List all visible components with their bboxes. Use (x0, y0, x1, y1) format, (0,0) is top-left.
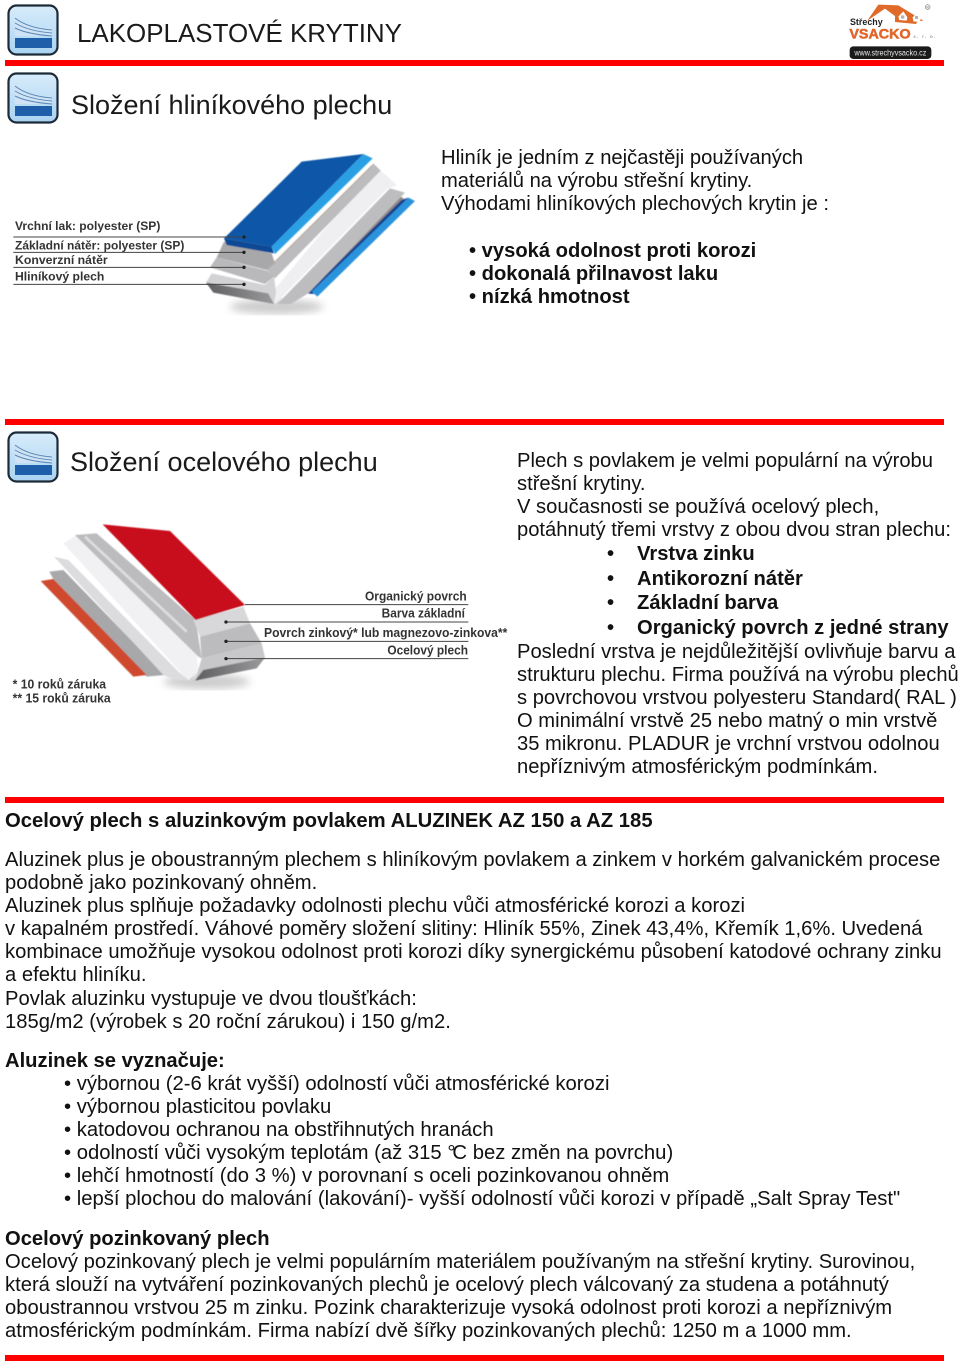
diagram: steel sheet layers: * 10 roků záruka (13, 678, 107, 692)
list: Aluzinek features: • odolností vůči vysokým teplotám (až 315 °C bez změn na povrchu) (64, 1142, 673, 1164)
heading: aluminium sheet composition: Složení hliníkového plechu (71, 90, 392, 120)
logo: Střechy Vsacko: s. r. o. (913, 34, 937, 39)
divider: top red bar (5, 60, 944, 66)
list: Aluzinek features: • lepší plochou do malování (lakování)- vyšší odolností vůči korozi v případě „Salt Spray Test" (64, 1188, 900, 1210)
list: steel sheet layers: Základní barva (637, 592, 778, 614)
divider: second red bar (5, 419, 944, 425)
diagram: steel sheet layers: Povrch zinkový* lub magnezovo-zinkova** (264, 626, 507, 640)
text: steel sheet introduction: střešní krytiny. (517, 473, 646, 495)
list: steel sheet layers: Vrstva zinku (637, 543, 755, 565)
list: aluminium advantages: • dokonalá přilnavost laku (469, 263, 718, 285)
title: LAKOPLASTOVÉ KRYTINY (77, 18, 402, 48)
text: steel sheet finish: nepříznivým atmosférickým podmínkám. (517, 756, 878, 778)
list: steel sheet layers: • (607, 592, 614, 614)
text: galvanized steel description (5, 1250, 915, 1342)
text: Aluzinek description: 185g/m2 (výrobek s 20 roční zárukou) i 150 g/m2. (5, 1011, 451, 1033)
diagram: aluminium sheet layers: Hliníkový plech (15, 270, 104, 284)
heading: Aluzinek features: Aluzinek se vyznačuje: (5, 1050, 225, 1072)
text: steel sheet finish: Poslední vrstva je nejdůležitější ovlivňuje barvu a (517, 640, 955, 662)
text: steel sheet introduction (517, 450, 951, 541)
text: Aluzinek description: kombinace umožňuje vysokou odolnost proti korozi díky synergickému působení katodové ochrany zinku (5, 941, 942, 963)
text: aluminium introduction (441, 146, 829, 215)
text: steel sheet finish (517, 640, 959, 778)
list: steel sheet layers: • (607, 568, 614, 590)
icon: steel heading (7, 431, 59, 483)
text: steel sheet introduction: V současnosti se používá ocelový plech, (517, 496, 879, 518)
heading: galvanized steel sheet: Ocelový pozinkovaný plech (5, 1228, 270, 1250)
logo: Střechy Vsacko: R (926, 5, 929, 9)
text: steel sheet introduction: Plech s povlakem je velmi populární na výrobu (517, 450, 933, 472)
text: Aluzinek description: podobně jako pozinkovaný ohněm. (5, 872, 317, 894)
list: steel sheet layers: • (607, 617, 614, 639)
text: galvanized steel description: atmosférickým podmínkám. Firma nabízí dvě šířky pozinkovaných plechů: 1250 m a 1000 mm. (5, 1320, 852, 1342)
diagram: steel sheet layers: ** 15 roků záruka (13, 691, 112, 705)
list: aluminium advantages: • vysoká odolnost proti korozi (469, 240, 756, 262)
icon: aluminium heading (7, 72, 59, 124)
text: steel sheet finish: s povrchovou vrstvou polyesteru Standard( RAL ) (517, 687, 957, 709)
list: steel sheet layers: Organický povrch z jedné strany (637, 617, 949, 639)
diagram: aluminium sheet layers: Základní nátěr: polyester (SP) (15, 238, 184, 252)
text: Aluzinek description (5, 848, 942, 1033)
list: aluminium advantages (469, 240, 756, 308)
diagram: steel sheet layers (12, 524, 508, 705)
text: aluminium introduction: Výhodami hliníkových plechových krytin je : (441, 193, 829, 215)
list: Aluzinek features: • výbornou (2-6 krát vyšší) odolností vůči atmosférické korozi (64, 1072, 609, 1094)
divider: bottom red bar (5, 1355, 944, 1361)
list: Aluzinek features (64, 1072, 900, 1210)
icon: header sheet metal (7, 4, 59, 56)
list: steel sheet layers (607, 543, 949, 639)
text: Aluzinek description: Povlak aluzinku vystupuje ve dvou tloušťkách: (5, 988, 417, 1010)
heading: steel sheet composition: Složení ocelového plechu (70, 447, 378, 477)
heading: Aluzinek sheet: Ocelový plech s aluzinkovým povlakem ALUZINEK AZ 150 a AZ 185 (5, 810, 653, 832)
diagram: steel sheet layers: Organický povrch (365, 589, 467, 603)
divider: third red bar (5, 797, 944, 803)
text: Aluzinek description: Aluzinek plus je oboustranným plechem s hliníkovým povlakem a zinkem v horkém galvanickém procese (5, 848, 940, 870)
text: aluminium introduction: materiálů na výrobu střešní krytiny. (441, 170, 752, 192)
logo: Střechy Vsacko: Střechy (850, 17, 883, 27)
list: Aluzinek features: • katodovou ochranou na obstřihnutých hranách (64, 1119, 494, 1141)
text: Aluzinek description: v kapalném prostředí. Váhové poměry složení slitiny: Hliník 55%, Zinek 43,4%, Křemík 1,6%. Uvedená (5, 918, 922, 940)
text: galvanized steel description: oboustrannou vrstvou 25 m zinku. Pozink charakterizuje vysoká odolnost proti korozi a nepříznivým (5, 1297, 892, 1319)
text: steel sheet finish: O minimální vrstvě 25 nebo matný o min vrstvě (517, 710, 937, 732)
diagram: aluminium sheet layers: Vrchní lak: polyester (SP) (15, 219, 160, 233)
diagram: steel sheet layers: Ocelový plech (387, 644, 468, 658)
list: Aluzinek features: • výbornou plasticitou povlaku (64, 1096, 331, 1118)
list: steel sheet layers: • (607, 543, 614, 565)
text: steel sheet finish: strukturu plechu. Firma používá na výrobu plechů (517, 664, 959, 686)
diagram: steel sheet layers: Barva základní (382, 607, 465, 621)
text: Aluzinek description: a efektu hliníku. (5, 964, 147, 986)
logo: Střechy Vsacko (849, 4, 937, 59)
text: galvanized steel description: která slouží na vytváření pozinkovaných plechů je ocelový plech válcovaný za studena a potáhnutý (5, 1274, 889, 1296)
list: aluminium advantages: • nízká hmotnost (469, 286, 630, 308)
text: Aluzinek description: Aluzinek plus splňuje požadavky odolnosti plechu vůči atmosférické korozi a korozi (5, 895, 745, 917)
text: steel sheet finish: 35 mikronu. PLADUR je vrchní vrstvou odolnou (517, 733, 940, 755)
diagram: aluminium sheet layers (13, 153, 416, 316)
text: steel sheet introduction: potáhnutý třemi vrstvy z obou dvou stran plechu: (517, 519, 951, 541)
list: Aluzinek features: • lehčí hmotností (do 3 %) v porovnaní s oceli pozinkovanou ohněm (64, 1165, 669, 1187)
logo: Střechy Vsacko: www.strechyvsacko.cz (853, 47, 926, 57)
text: galvanized steel description: Ocelový pozinkovaný plech je velmi populárním materiálem používaným na střešní krytiny. Surovinou, (5, 1250, 915, 1272)
logo: Střechy Vsacko: VSACKO (849, 25, 911, 41)
text: aluminium introduction: Hliník je jedním z nejčastěji používaných (441, 146, 803, 168)
diagram: aluminium sheet layers: Konverzní nátěr (15, 253, 108, 267)
list: steel sheet layers: Antikorozní nátěr (637, 568, 803, 590)
